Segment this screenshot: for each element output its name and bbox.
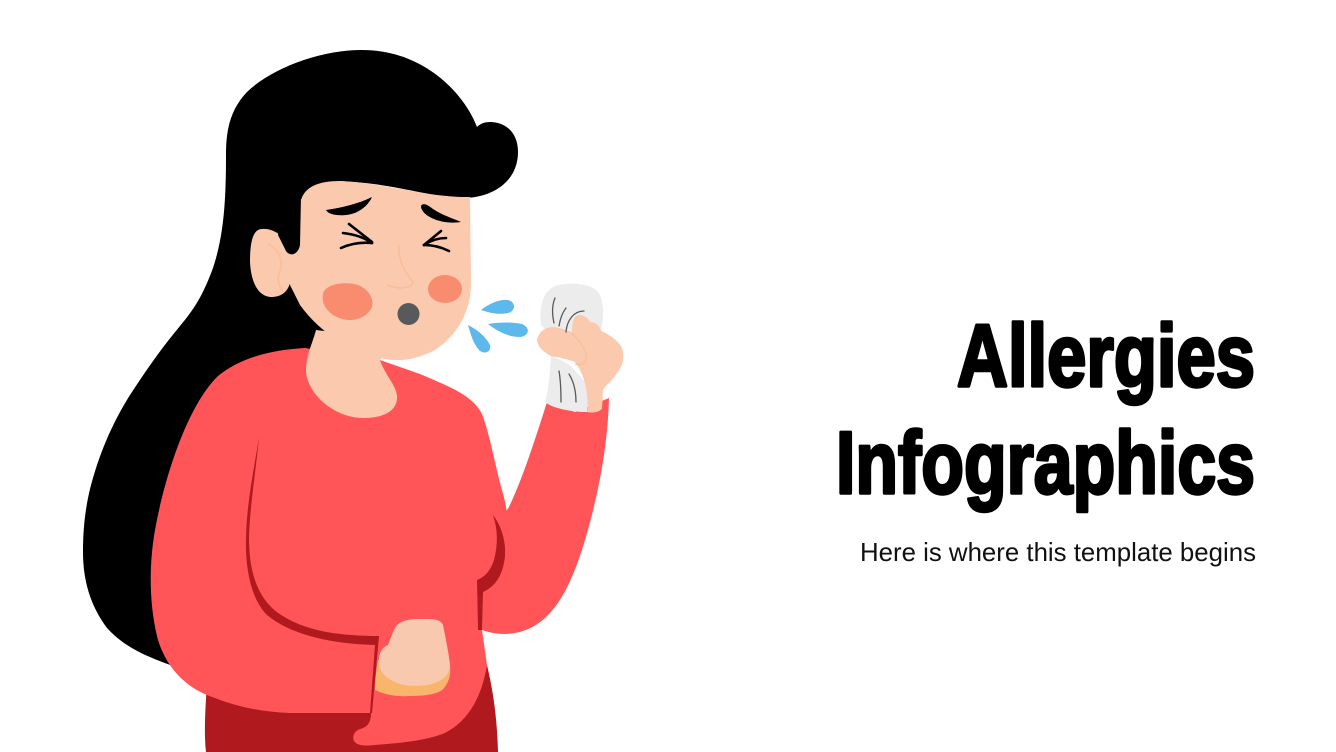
eye left squeezed	[341, 224, 372, 248]
pants	[205, 665, 498, 752]
subtitle: Here is where this template begins	[860, 537, 1256, 567]
sweater fold: underarm	[477, 515, 505, 630]
hair	[83, 50, 518, 666]
tissue top	[541, 284, 603, 345]
ear detail	[268, 244, 283, 292]
eye right squeezed	[424, 231, 449, 251]
nose	[387, 245, 413, 288]
eyebrow right	[421, 204, 461, 223]
ear	[250, 229, 295, 297]
sweater fold: arm line	[246, 437, 379, 713]
hair sideburn	[278, 195, 301, 254]
eyebrow left	[326, 197, 372, 215]
illustration: sneezing woman	[83, 50, 623, 752]
arm raised	[470, 398, 609, 634]
tissue creases	[553, 298, 584, 402]
sneeze drops	[468, 300, 528, 352]
face	[285, 181, 471, 360]
title	[836, 306, 1255, 512]
neck	[306, 330, 400, 418]
hand at stomach shadow	[375, 660, 450, 696]
cheek right	[428, 275, 462, 303]
hand holding tissue	[537, 315, 623, 413]
tissue bottom	[545, 355, 588, 412]
mouth	[398, 303, 420, 325]
hand finger shadow	[571, 333, 586, 365]
sweater body and sleeve	[151, 348, 507, 746]
title line 1: Allergies	[957, 306, 1255, 405]
cheek left	[323, 283, 372, 320]
hand at stomach	[379, 619, 450, 686]
